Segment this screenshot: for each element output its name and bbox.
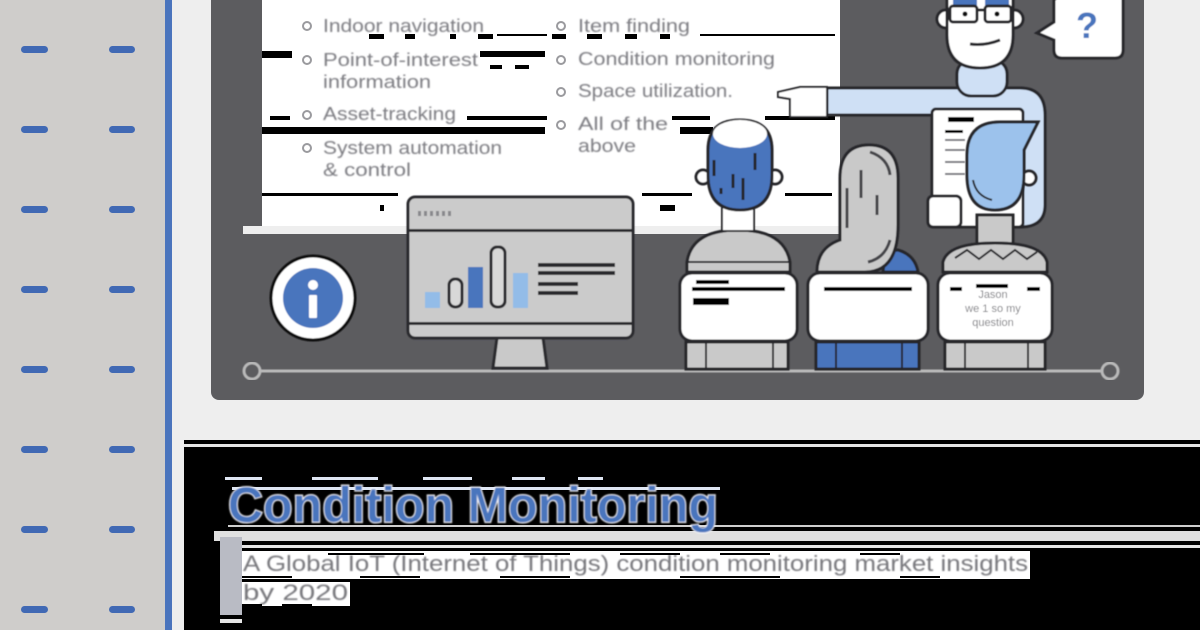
subtitle bbox=[242, 551, 1030, 606]
teacher bbox=[778, 0, 1045, 227]
use case list: left column: information bbox=[323, 72, 431, 92]
student right: we 1 so my bbox=[964, 303, 1021, 315]
use case list: right column: All of the bbox=[578, 114, 668, 134]
student right bbox=[938, 122, 1052, 369]
speech bubble with question mark: ? bbox=[1076, 5, 1098, 46]
panel: condition monitoring text bbox=[184, 440, 1200, 630]
speech bubble with question mark bbox=[1037, 0, 1123, 58]
student left bbox=[680, 120, 797, 369]
baseline with end nodes bbox=[244, 363, 1118, 379]
subtitle: A Global IoT (Internet of Things) condition monitoring market insights bbox=[243, 551, 1028, 576]
title: Condition Monitoring bbox=[228, 477, 718, 533]
use case list: left column: Indoor navigation bbox=[323, 16, 484, 36]
panel: left binder strip bbox=[0, 0, 184, 630]
accent bar bbox=[220, 537, 242, 615]
subtitle: by 2020 bbox=[243, 580, 348, 605]
whiteboard bbox=[243, 0, 840, 234]
use case list: right column: above bbox=[578, 136, 636, 156]
use case list: left column: Asset-tracking bbox=[323, 104, 456, 124]
monitor with bar chart bbox=[408, 197, 633, 368]
use case list: right column: Condition monitoring bbox=[578, 49, 775, 69]
use case list: left column bbox=[303, 16, 502, 180]
bar chart bbox=[425, 247, 528, 308]
use case list: right column: Space utilization. bbox=[578, 81, 733, 101]
icon: info bbox=[271, 256, 355, 340]
use case list: left column: & control bbox=[323, 160, 411, 180]
panel: classroom illustration bbox=[211, 0, 1144, 400]
use case list: right column bbox=[557, 16, 775, 156]
use case list: left column: System automation bbox=[323, 138, 502, 158]
use case list: right column: Item finding bbox=[578, 16, 690, 36]
teacher pointing hand bbox=[778, 87, 827, 117]
use case list: left column: Point-of-interest bbox=[323, 50, 478, 70]
student right: Jason bbox=[978, 289, 1008, 301]
student right: question bbox=[972, 317, 1014, 329]
student middle bbox=[808, 145, 928, 369]
